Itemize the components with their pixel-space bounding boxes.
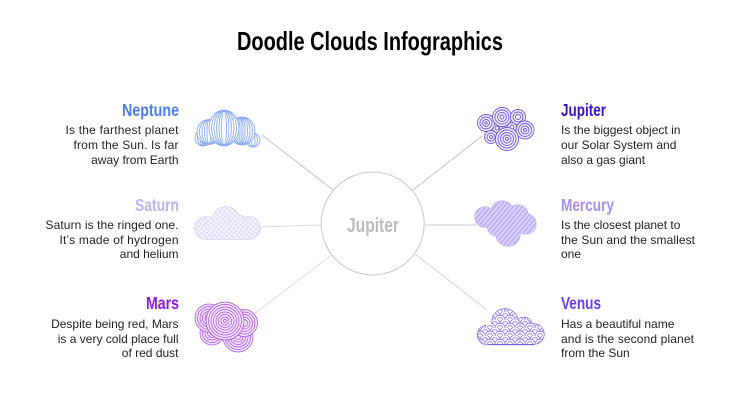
icon: Saturn cloud with crosshatch — [194, 206, 261, 240]
panel: Jupiter text: Jupiter — [561, 100, 606, 120]
panel: Venus text: from the Sun — [561, 346, 630, 360]
icon: Mars cloud with swirling lines — [195, 302, 258, 352]
panel: Saturn text: Saturn — [135, 195, 179, 215]
panel: Saturn text: Saturn is the ringed one. — [46, 218, 178, 232]
central circle with Jupiter label — [321, 172, 424, 275]
connector lines from the central circle — [254, 135, 487, 314]
panel: Mercury text: Mercury — [561, 195, 614, 215]
panel: Neptune text: away from Earth — [91, 153, 178, 167]
icon: Jupiter cloud with spirals — [478, 108, 534, 150]
panel: Mars text: is a very cold place full — [58, 332, 178, 346]
panel: Neptune text: Is the farthest planet — [66, 123, 179, 137]
panel: Saturn text: It’s made of hydrogen — [60, 233, 178, 247]
panel: Mercury text: one — [561, 247, 581, 261]
panel: Mars text — [51, 293, 179, 360]
panel: Jupiter text — [561, 100, 680, 167]
panel: Venus text: and is the second planet — [561, 332, 695, 346]
panel: Venus text: Has a beautiful name — [561, 317, 675, 331]
panel: Venus text: Venus — [561, 293, 601, 313]
icon: Mercury cloud with diagonal streaks — [474, 200, 537, 247]
panel: Saturn text: and helium — [120, 247, 178, 261]
panel: Jupiter text: Is the biggest object in — [561, 123, 680, 137]
panel: Jupiter text: also a gas giant — [561, 153, 646, 167]
panel: Neptune text — [66, 100, 179, 167]
panel: Saturn text — [46, 195, 179, 261]
panel: Jupiter text: our Solar System and — [561, 138, 676, 152]
panel: Venus text — [561, 293, 695, 360]
central circle with Jupiter label: Jupiter — [347, 215, 399, 237]
title: Doodle Clouds Infographics — [237, 26, 503, 56]
panel: Mars text: Mars — [146, 293, 179, 313]
panel: Mercury text: Is the closest planet to — [561, 218, 681, 232]
panel: Mercury text — [561, 195, 696, 261]
panel: Mars text: of red dust — [122, 346, 179, 360]
panel: Neptune text: from the Sun. Is far — [74, 138, 178, 152]
icon: Neptune cloud with curved stripes — [195, 110, 260, 147]
panel: Neptune text: Neptune — [122, 100, 179, 120]
icon: Venus cloud with scallop scales — [476, 308, 545, 346]
panel: Mercury text: the Sun and the smallest — [561, 233, 696, 247]
panel: Mars text: Despite being red, Mars — [51, 317, 178, 331]
